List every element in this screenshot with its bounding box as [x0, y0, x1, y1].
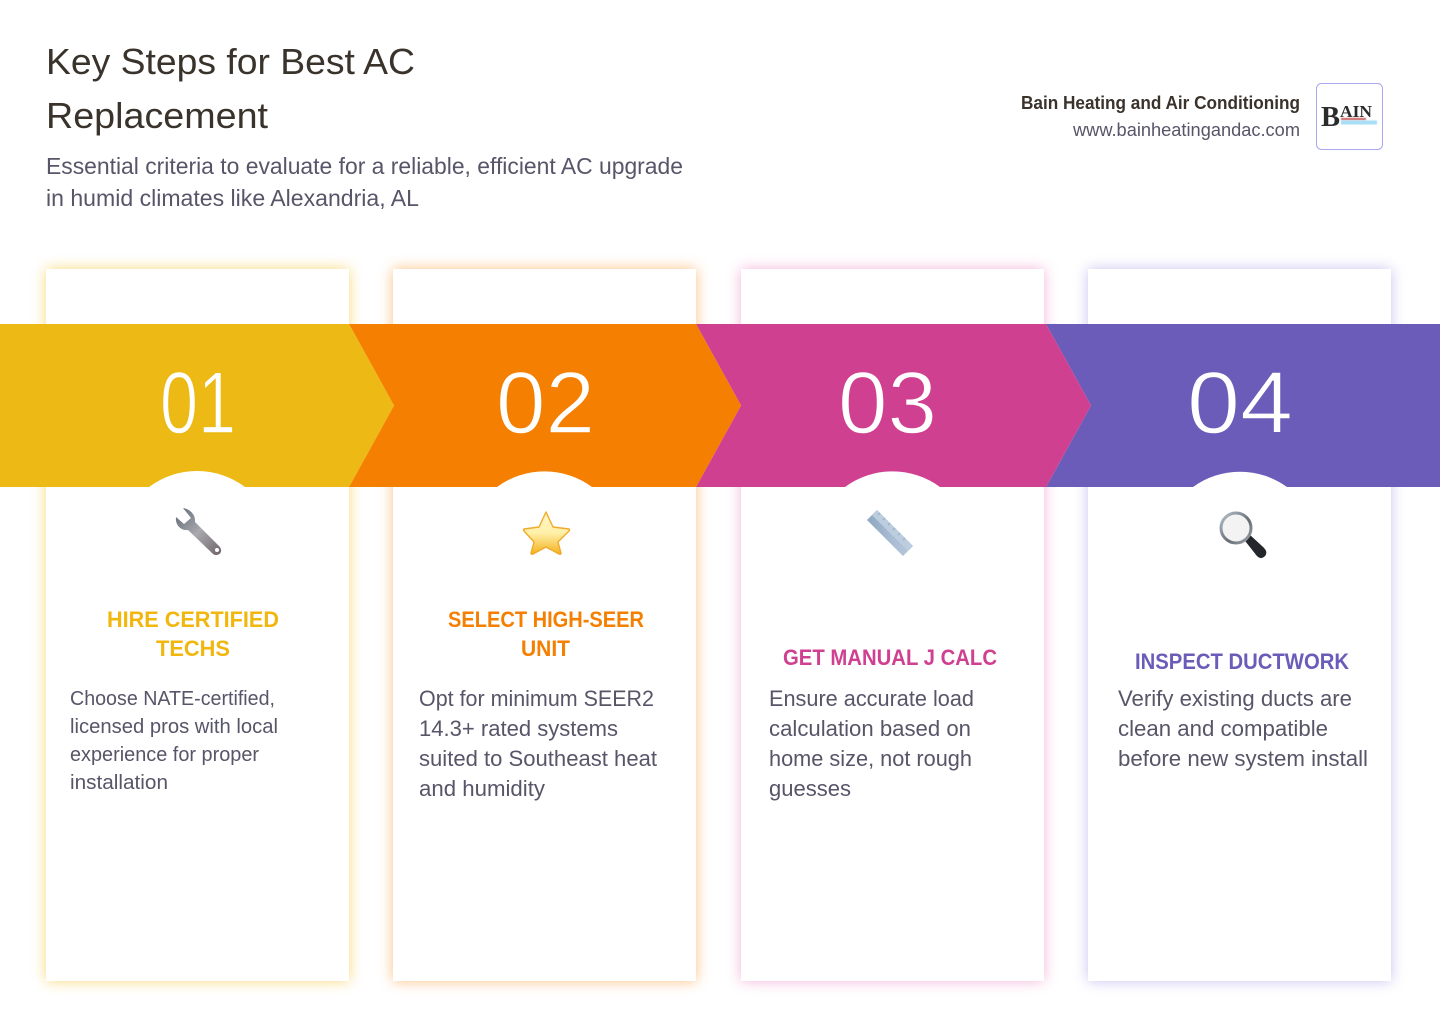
- icon: wrench: [149, 471, 245, 555]
- text: step 1 description: [70, 688, 278, 794]
- brand name and website: Bain Heating and Air Conditioning: [1021, 93, 1300, 113]
- arrow: step 3 band: [696, 324, 1091, 487]
- heading: inspect ductwork: INSPECT DUCTWORK: [1135, 649, 1349, 674]
- heading: select high-seer unit: [448, 607, 644, 661]
- subtitle: Essential criteria to evaluate for a reliable, efficient AC upgrade: [46, 153, 683, 179]
- text: step 2 description: and humidity: [419, 776, 545, 801]
- text: step 3 description: home size, not rough: [769, 746, 972, 771]
- title: Key Steps for Best AC: [46, 41, 415, 82]
- icon: star: [497, 471, 592, 554]
- text: step 3 description: Ensure accurate load: [769, 686, 974, 711]
- text: step 1 description: experience for proper: [70, 744, 259, 766]
- text: step 2 description: [419, 686, 657, 801]
- arrow: step 4 band: [1046, 324, 1440, 487]
- arrow: step 1 band: 01: [160, 353, 236, 452]
- title: Replacement: [46, 95, 268, 136]
- panel: step 3 card: [741, 269, 1044, 981]
- heading: select high-seer unit: SELECT HIGH-SEER: [448, 607, 644, 632]
- heading: hire certified techs: HIRE CERTIFIED: [107, 607, 279, 632]
- text: step 4 description: Verify existing ducts are: [1118, 686, 1352, 711]
- arrow: step 2 band: 02: [496, 353, 595, 452]
- logo: AIN: [1340, 102, 1373, 121]
- arrow: step 1 band: [0, 324, 394, 487]
- icon: magnifying glass: [1193, 472, 1287, 556]
- text: step 1 description: installation: [70, 772, 168, 794]
- heading: hire certified techs: TECHS: [156, 636, 230, 661]
- text: step 1 description: Choose NATE-certified,: [70, 688, 275, 710]
- heading: get manual j calc: GET MANUAL J CALC: [783, 645, 997, 670]
- title: [46, 41, 415, 136]
- text: step 3 description: calculation based on: [769, 716, 971, 741]
- logo: B: [1321, 101, 1340, 133]
- heading: select high-seer unit: UNIT: [521, 636, 571, 661]
- heading: hire certified techs: [107, 607, 279, 661]
- text: step 3 description: guesses: [769, 776, 851, 801]
- text: step 3 description: [769, 686, 974, 801]
- icon: ruler: [845, 471, 940, 556]
- brand name and website: www.bainheatingandac.com: [1072, 120, 1300, 140]
- panel: step 2 card: [393, 269, 696, 981]
- arrow: step 4 band: 04: [1187, 353, 1293, 452]
- text: step 4 description: before new system install: [1118, 746, 1368, 771]
- text: step 2 description: suited to Southeast heat: [419, 746, 657, 771]
- subtitle: in humid climates like Alexandria, AL: [46, 185, 419, 211]
- brand name and website: [1021, 93, 1300, 140]
- arrow: step 2 band: [349, 324, 741, 487]
- panel: step 1 card: [46, 269, 349, 981]
- arrow: step 3 band: 03: [838, 353, 937, 452]
- text: step 2 description: 14.3+ rated systems: [419, 716, 618, 741]
- panel: step 4 card: [1088, 269, 1391, 981]
- subtitle: [46, 153, 683, 211]
- text: step 1 description: licensed pros with local: [70, 716, 278, 738]
- text: step 4 description: [1118, 686, 1368, 771]
- text: step 2 description: Opt for minimum SEER2: [419, 686, 654, 711]
- text: step 4 description: clean and compatible: [1118, 716, 1328, 741]
- logo: [1316, 84, 1382, 150]
